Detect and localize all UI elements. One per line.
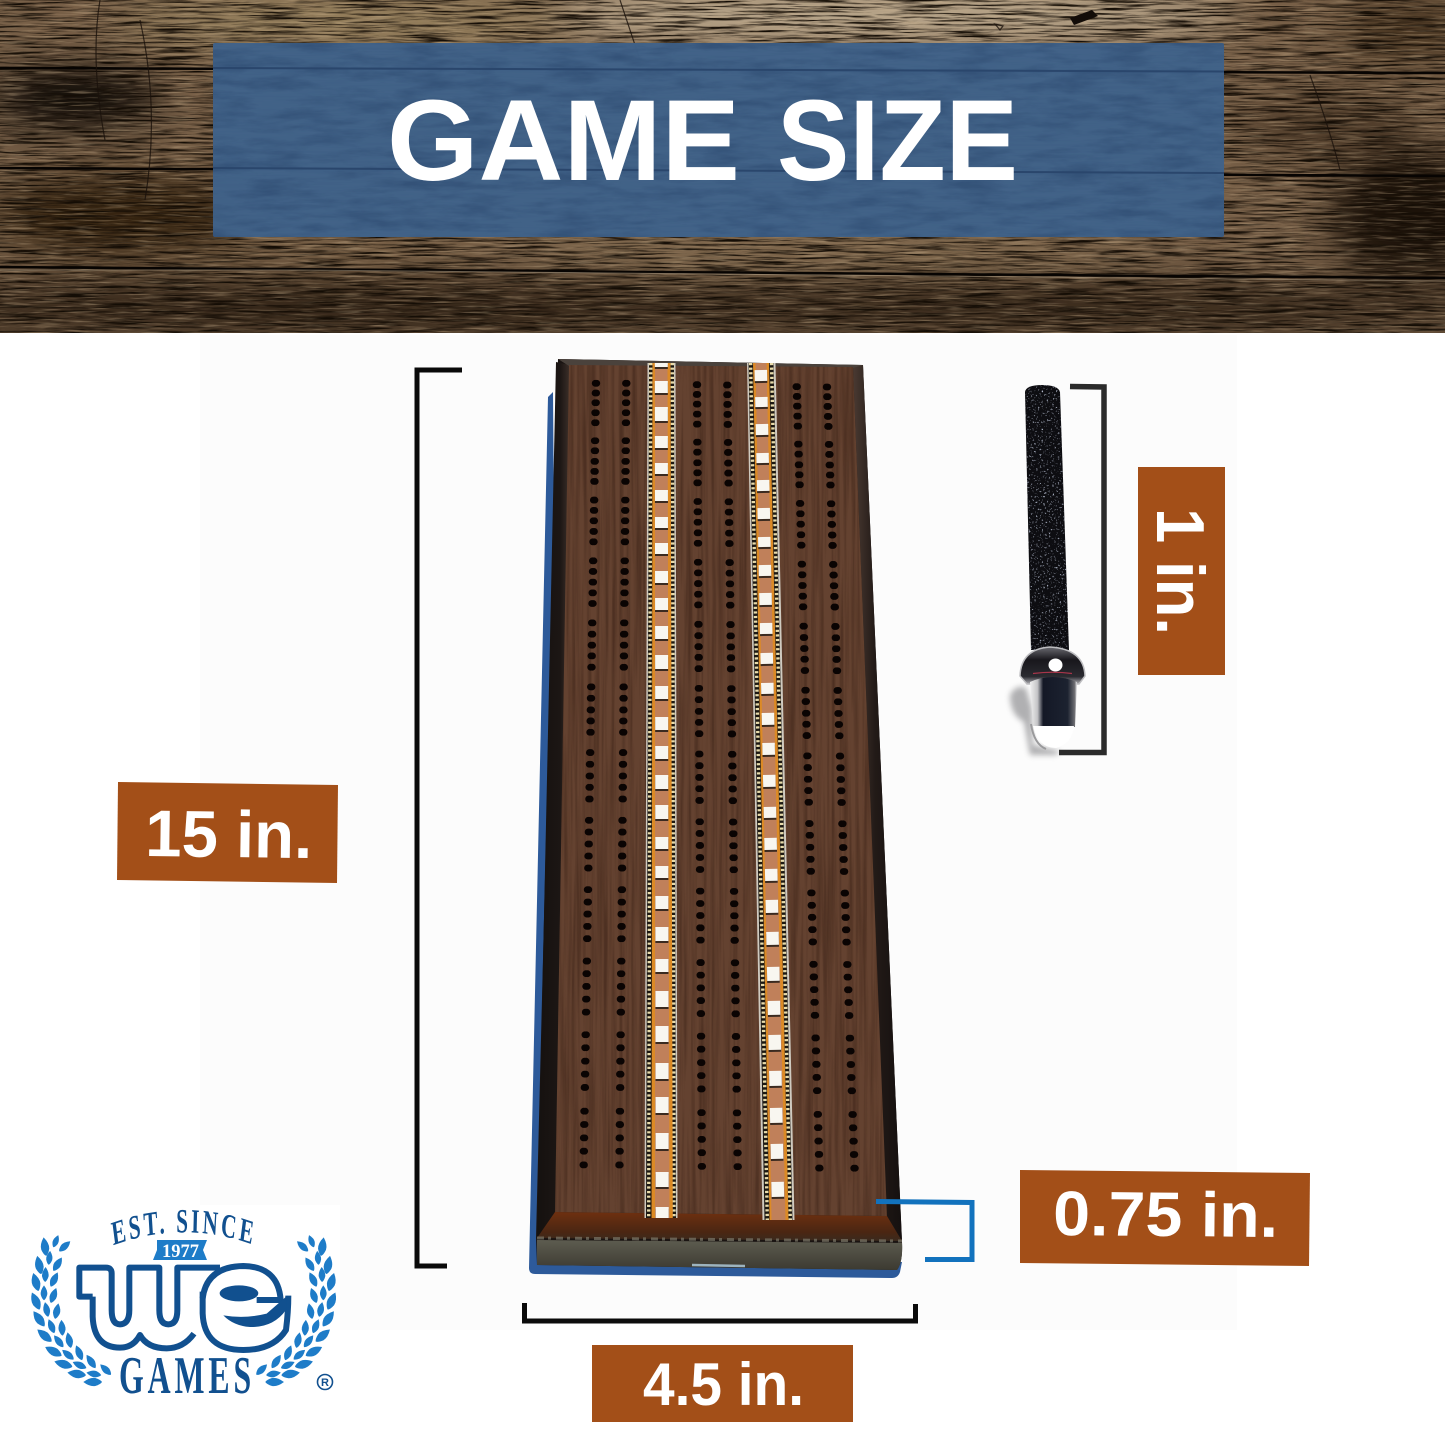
label: 1 in. (1138, 467, 1225, 675)
blue shadow (529, 392, 902, 1278)
logo: WE Games (31, 1210, 336, 1405)
title: GAME (387, 77, 740, 205)
banner: game size (213, 43, 1224, 237)
peg holes (582, 383, 856, 1190)
peg ball (1020, 647, 1085, 684)
height bracket: 15 in. (417, 370, 462, 1266)
label: 0.75 in. (1020, 1170, 1310, 1266)
logo background (0, 1205, 340, 1445)
left bevel (537, 362, 570, 1240)
board body (536, 359, 902, 1270)
registered mark (318, 1374, 332, 1390)
depth bracket: 0.75 in. (876, 1202, 972, 1260)
WE monogram (79, 1266, 288, 1350)
off-white product panel (200, 335, 1237, 1330)
inlay strip right (747, 363, 794, 1220)
registered mark: R (321, 1377, 329, 1389)
header: wood plank background (0, 0, 1445, 334)
title (387, 77, 1018, 205)
peg tip (1033, 726, 1074, 748)
label: 4.5 in.: 4.5 in. (643, 1351, 804, 1418)
front edge (537, 1240, 902, 1270)
est. since: EST. SINCE (110, 1210, 253, 1246)
right bevel (853, 365, 902, 1242)
1977 ribbon (153, 1240, 207, 1262)
peg (1010, 380, 1085, 755)
title: SIZE (777, 77, 1018, 205)
inlay strip left (644, 363, 678, 1218)
1977 ribbon: 1977 (162, 1241, 199, 1262)
top edge (558, 359, 863, 368)
bottom bevel (537, 1212, 902, 1241)
cribbage board (529, 359, 902, 1278)
peg shaft (1025, 385, 1069, 650)
peg shadow (1010, 687, 1060, 755)
label: 4.5 in. (592, 1345, 853, 1422)
playing surface (550, 360, 895, 1220)
label: 0.75 in.: 0.75 in. (1053, 1179, 1278, 1251)
games: GAMES (119, 1347, 255, 1405)
label: 15 in. (117, 782, 338, 883)
peg bracket: 1 in. (1059, 386, 1104, 752)
peg collar (1030, 677, 1077, 727)
width bracket: 4.5 in. (524, 1303, 916, 1321)
est. since (110, 1210, 284, 1314)
label: 15 in.: 15 in. (145, 796, 313, 872)
label: 1 in.: 1 in. (1142, 508, 1218, 635)
laurels (28, 1234, 339, 1386)
